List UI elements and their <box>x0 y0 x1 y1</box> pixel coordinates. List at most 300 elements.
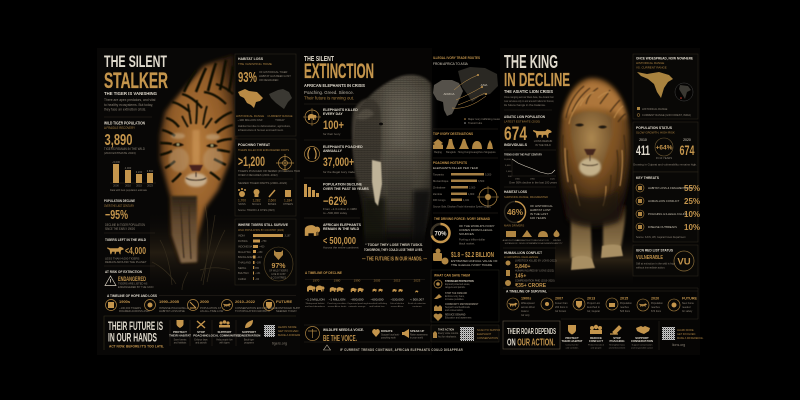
image: ground <box>555 235 633 285</box>
text block: learn more <box>672 329 704 347</box>
timeline: survival: Population <box>620 302 632 305</box>
bar chart: tiger population <box>110 160 156 192</box>
heading: elephant title: THE SILENT <box>304 54 334 63</box>
icon: elephant <box>305 225 320 236</box>
donut chart: 70 percent: 70% <box>434 232 447 238</box>
milestone: 2000: 2000 <box>200 299 210 304</box>
card: habitat loss: SCARCITY <box>551 242 563 245</box>
text block: tagline: Poaching. Greed. Silence. <box>304 90 354 95</box>
heading: tiger title: THE TIGER IS VANISHING <box>104 91 157 96</box>
line chart: trend <box>504 152 558 184</box>
card: habitat loss: HABITAT LOST <box>530 208 551 212</box>
card: habitat loss: AGRICULTURAL <box>503 239 520 242</box>
map: historical range <box>637 72 673 98</box>
action: support conservation: Back tiger <box>244 338 254 342</box>
text block: intro: now survives only in and around India's Gir Forest, <box>504 99 554 103</box>
heading: lion title <box>504 52 570 95</box>
milestone: 1900s: ~100,000 TIGERS <box>119 306 141 310</box>
stat: tigers left in the wild: <4,000 <box>125 246 146 257</box>
milestone: 1990-2005: 1990–2005 <box>159 299 180 304</box>
card: habitat loss: LIVESTOCK <box>537 240 550 242</box>
card: range map: HISTORICAL RANGE <box>636 61 664 65</box>
timeline: survival: reaches <box>620 306 630 309</box>
action: support local communities: SUPPORT <box>218 330 232 334</box>
timeline: decline: 1990 <box>354 278 361 282</box>
card: poaching hotspots: 3,500 <box>478 180 485 183</box>
card: where tigers still survive: 355 <box>255 267 260 270</box>
stat: wild tiger population: TIGERS REMAIN IN THE WILD <box>104 147 145 151</box>
action: support conservation: Support conservation <box>632 344 653 346</box>
map: historical range <box>238 89 263 108</box>
action: protect their habitat <box>561 325 583 350</box>
card: range map: CURRENT RANGE (GIR FOREST, INDIA) <box>642 113 691 117</box>
line chart: trend: 2020 <box>550 178 556 180</box>
heading: tiger title: STALKER <box>104 68 168 93</box>
bar chart: tiger population: 3,890 <box>147 169 154 173</box>
card: habitat loss: HABITAT LOSS <box>238 56 263 61</box>
card: top ivory destinations: Bangkok <box>446 151 457 154</box>
card: poaching threat: 1,282 <box>253 198 261 202</box>
action: protect habitat <box>169 320 191 344</box>
call to action: tiger <box>104 316 307 350</box>
action: protect habitat: and habitats <box>174 342 187 344</box>
timeline: decline: and herd abundance <box>305 305 326 308</box>
icon: crosshair <box>276 154 294 172</box>
stat: tigers left in the wild: LESS THAN 4,000 TIGERS <box>105 256 140 260</box>
card: poaching threat: SKINS <box>238 203 246 206</box>
timeline: decline <box>305 270 427 308</box>
action: stop poaching: Strengthen laws <box>609 344 626 346</box>
card: population status <box>633 122 698 172</box>
card: what can save them: Support local livelihoods <box>445 306 471 309</box>
card: population status: Growing in Gujarat and vulnerability remains high. <box>633 162 697 166</box>
card: habitat loss: HABITAT HAS BEEN LOST <box>259 74 291 78</box>
card: poaching threat: POACHING THREAT <box>238 142 270 147</box>
card: range map: ONCE WIDESPREAD, NOW NOWHERE <box>636 56 694 60</box>
stat: wild tiger population: WILD TIGER POPULATION <box>104 120 145 126</box>
action: reduce conflict: Protect livestock <box>588 344 605 346</box>
stat: poached annually: for the illegal ivory trade <box>323 170 355 174</box>
action: donate: poaching work <box>381 336 397 340</box>
card: poaching threat: TIGERS POACHED OR SEIZED (IN ILLEGAL TRADE) <box>238 169 304 173</box>
card: top ivory destinations: Hong Kong <box>458 151 471 154</box>
card: poaching threat: OVER 2 DECADES (2000–2022) <box>238 173 278 177</box>
card: where tigers still survive: ~400 <box>259 246 265 248</box>
box: take action: Act for elephants. <box>438 336 457 338</box>
timeline: decline: continues <box>412 305 423 308</box>
action: speak up: Raise awareness <box>410 334 428 336</box>
timeline: survival: needed <box>682 306 691 309</box>
text block: intro: they face an extinction crisis. <box>104 108 146 112</box>
timeline: decline: ~1.3 MILLION <box>305 298 325 302</box>
card: what can save them: Expand protected areas, <box>445 283 470 286</box>
card: population status: 411 <box>636 142 650 158</box>
card: poaching threat: 1,700 <box>238 198 246 202</box>
card: iucn status: VULNERABLE <box>636 255 663 261</box>
action: protect their habitat: THEIR HABITAT <box>561 339 583 343</box>
map: india inset <box>675 83 693 101</box>
card: human-lion conflict: COMPENSATION PAID (2015–2020) <box>515 280 555 282</box>
card: poaching threat: BONES <box>268 203 277 206</box>
box: take action <box>431 325 503 342</box>
stat: poached annually <box>304 145 363 174</box>
card: where tigers still survive: 3,167 <box>284 234 291 238</box>
card: poaching threat: Source: TRAFFIC & CITES (2023) <box>238 209 275 212</box>
card: where tigers still survive: BANGLADESH <box>238 255 256 259</box>
card: ivory demand: THE DRIVING FORCE: IVORY DEMAND <box>434 216 490 221</box>
callout: 97 percent: LIVE IN JUST <box>271 274 286 276</box>
line chart: trend: TREND OVER THE PAST CENTURY <box>504 152 542 156</box>
text block: tagline: Their future is running out. <box>304 96 354 100</box>
action: protect habitat: THEIR HABITAT <box>169 334 191 338</box>
icon: star emblem <box>144 300 156 310</box>
line chart: trend: 1900 <box>515 178 521 180</box>
card: human-lion conflict: A GROWING CHALLENGE <box>504 255 538 259</box>
stat: asiatic lion population: LIONS REMAIN <box>534 139 552 143</box>
action: stop poaching: Enforce laws <box>194 338 208 342</box>
action: speak up: SPEAK UP <box>410 329 424 333</box>
stat: at risk of extinction <box>105 269 153 289</box>
card: habitat loss: OF HISTORICAL TIGER <box>259 70 287 74</box>
stat: population decline: SINCE THE EARLY 1900S <box>105 227 135 231</box>
card: range map: VS. CURRENT RANGE <box>636 66 667 70</box>
action: stop poaching: STOP <box>613 336 621 340</box>
milestone: future: FUTURE <box>276 299 293 304</box>
action: support conservation: programs <box>244 342 255 344</box>
image: elephant <box>350 70 434 250</box>
bar chart: tiger population: 2023 <box>147 184 153 188</box>
timeline: survival: reaches <box>651 306 661 309</box>
icons: seized parts <box>238 188 291 197</box>
action: support conservation: SUPPORT <box>242 330 256 334</box>
timeline: decline: 1970 <box>313 278 320 282</box>
timeline: survival: 2007 <box>555 296 563 300</box>
timeline: survival: 674 lions <box>651 310 662 313</box>
timeline: hope and loss <box>106 294 309 313</box>
card: population status: 2010 <box>639 138 647 142</box>
card: population status: SLOW GROWTH, HIGH RISK <box>636 130 675 134</box>
text block: learn more <box>272 325 307 346</box>
card: range map: HISTORICAL RANGE <box>642 107 668 111</box>
card: habitat loss: INFRASTRUCTURE <box>517 239 538 242</box>
line chart: trend: 10,000 <box>504 159 511 161</box>
text block: learn more: lions.org <box>672 343 685 347</box>
card: what can save them: WHAT CAN SAVE THEM <box>434 272 470 278</box>
stat: remaining in the wild: REMAIN IN THE WILD <box>323 227 360 231</box>
stat: killed every day: for their ivory <box>323 132 341 136</box>
card: poaching threat: 2,600 <box>268 198 276 202</box>
card: key threats <box>633 172 700 242</box>
map: africa and asia: AFRICA <box>443 92 455 96</box>
warning strip <box>324 345 463 352</box>
action: stop poaching <box>609 326 626 350</box>
card: habitat loss: Habitat lost due to deforestation, agriculture, <box>238 124 291 128</box>
icons: shrinking herds <box>307 286 418 293</box>
card: ivory demand: OF THE WORLD'S IVORY <box>459 224 495 228</box>
callout: 97 percent: OF WILD TIGERS <box>269 270 288 272</box>
stat: population decline: −95% <box>105 207 128 222</box>
text block: intro: There are apex predators, and vital <box>104 98 156 102</box>
card: where tigers still survive <box>235 219 296 285</box>
card: poaching threat: SEIZED TIGER PARTS (2000–2022) <box>238 181 287 185</box>
card: key threats: 10% <box>684 223 700 232</box>
card: poaching hotspots: Tanzania <box>433 172 444 176</box>
card: where tigers still survive: BHUTAN <box>238 271 249 275</box>
icon: shield <box>264 300 274 310</box>
bar chart: tiger population: 2010 <box>125 184 131 188</box>
card: where tigers still survive: RUSSIA <box>238 239 248 243</box>
qr code <box>662 327 675 340</box>
card: where tigers still survive: THAILAND <box>238 260 251 264</box>
timeline: decline: ~800,000 <box>350 298 364 302</box>
card: where tigers still survive: WILD POPULATION BY COUNTRY (2023) <box>238 228 284 232</box>
card: population status: POPULATION STATUS <box>636 125 672 130</box>
card: iucn status: without immediate action. <box>636 266 666 270</box>
stat: population decline: −62% <box>323 194 347 208</box>
qr code <box>264 325 275 337</box>
text block: intro <box>504 95 554 107</box>
card: poaching threat: 1,184 <box>284 198 292 202</box>
timeline: decline: Intensified trafficking <box>367 302 388 305</box>
stat: tigers left in the wild: REMAIN AROUND THE PLANET <box>105 260 147 264</box>
card: poaching hotspots: 5,200 <box>485 174 492 176</box>
stat: at risk of extinction: ENDANGERED <box>118 277 146 283</box>
action: stop poaching: and patrols <box>195 342 208 344</box>
card: ivory trade routes: Major ivory trafficking routes <box>468 117 501 121</box>
card: ivory demand: ESTIMATED ANNUAL VALUE OF <box>451 259 498 263</box>
timeline: decline: A TIMELINE OF DECLINE <box>305 270 342 275</box>
timeline: survival: 2013 <box>587 296 595 300</box>
stat: population decline: POPULATION DECLINE <box>323 182 363 186</box>
timeline: decline: 2023 <box>414 278 421 282</box>
heading: lion title: THE ASIATIC LION CRISIS <box>504 89 554 95</box>
map: africa and asia: ASIA <box>481 83 487 87</box>
milestone: 1900s <box>119 299 150 313</box>
icon: heart <box>372 329 380 337</box>
stat: population decline: POPULATION DECLINE <box>104 198 135 203</box>
icon: tiger silhouette <box>107 247 124 254</box>
timeline: decline: Critical decline <box>390 302 405 305</box>
milestone: 2010-2022: TO POPULATION GROWTH <box>235 309 270 313</box>
heading: elephant title: EXTINCTION <box>304 60 374 83</box>
card: habitat loss <box>235 54 296 136</box>
action: support conservation: CONSERVATION <box>238 334 260 338</box>
badge: VU: VU <box>677 256 691 268</box>
icon: scales emblem <box>306 326 320 340</box>
line chart: trend: 1950 <box>530 178 536 180</box>
card: where tigers still survive: ~131 <box>255 272 261 275</box>
card: ivory demand <box>432 213 498 267</box>
stat: asiatic lion population: IN THE WILD <box>535 143 551 147</box>
stat: population decline <box>304 182 369 215</box>
card: where tigers still survive: MALAYSIA <box>238 250 251 254</box>
card: what can save them: REDUCE DEMAND <box>445 314 466 316</box>
stat: tigers left in the wild <box>105 237 147 264</box>
card: population status: 2020 <box>683 138 691 142</box>
timeline: survival: New home <box>682 302 695 305</box>
timeline: survival: A TIMELINE OF SURVIVAL <box>506 288 548 294</box>
card: human-lion conflict: LIVESTOCK KILLED BY LIONS (2022) <box>515 260 557 262</box>
card: habitat loss: IN THE LAST <box>530 212 548 216</box>
stat: killed every day <box>303 108 358 136</box>
callout: 97 percent: 97% <box>271 263 286 270</box>
text block: learn more: MAKE A DIFFERENCE <box>278 333 307 337</box>
text block: learn more: MAKE A DIFFERENCE. <box>677 337 704 340</box>
bar chart: tiger population: ~5,000 <box>112 160 121 164</box>
card: population status: 674 <box>680 142 695 158</box>
action: reduce conflict: and people <box>591 348 602 350</box>
call to action: lion: THEIR ROAR DEPENDS <box>507 327 556 336</box>
action: stop poaching: POACHING <box>193 334 210 338</box>
stat: at risk of extinction: ENDANGERED BY THE IUCN <box>118 285 153 289</box>
card: human-lion conflict: HUMAN INJURED BY LIONS (2022) <box>515 270 554 272</box>
card: top ivory destinations: Beijing <box>434 151 442 154</box>
card: where tigers still survive: CHINA <box>238 277 246 281</box>
stat: killed every day: ELEPHANTS KILLED <box>323 108 358 112</box>
action: support local communities: LOCAL COMMUNITIES <box>209 334 240 338</box>
card: habitat loss: 93% <box>238 69 257 86</box>
callout: 97 percent <box>264 247 293 281</box>
stat: wild tiger population: (2023 ESTIMATE 2023) <box>104 151 136 155</box>
call to action: lion: ON OUR ACTION. <box>507 338 555 348</box>
call to action: tiger: THEIR FUTURE IS <box>108 319 163 333</box>
timeline: hope and loss: A TIMELINE OF HOPE AND LOSS <box>107 294 157 298</box>
stat: poached annually: 37,000+ <box>323 155 354 169</box>
card: habitat loss: HISTORICAL RANGE <box>236 114 264 118</box>
timeline: decline: 2015 <box>394 278 401 282</box>
timeline: decline: 1980 <box>334 278 341 282</box>
heading: lion title: THE KING <box>504 52 558 72</box>
action: protect their habitat: and corridors <box>566 346 579 350</box>
card: key threats: 55% <box>684 184 700 193</box>
action: stop poaching: POACHING <box>609 339 625 343</box>
box: take action: SCAN TO SUPPORT <box>477 328 503 332</box>
card: what can save them: rangers and patrols. <box>445 286 466 289</box>
timeline: survival: launched in <box>587 306 600 309</box>
map: current range <box>269 89 292 109</box>
text block: intro: its future hangs in the balance. <box>504 103 546 107</box>
card: habitat loss: EXPANSION <box>505 242 518 245</box>
card: habitat loss: OF HISTORICAL <box>530 204 553 208</box>
image: tiger <box>160 55 235 263</box>
line chart: trend: 1,000 <box>506 171 512 173</box>
card: poaching threat: OTHERS <box>283 203 293 206</box>
quote: — THE FUTURE IS IN OUR HANDS. — <box>362 256 427 262</box>
card: where tigers still survive: ~750 <box>261 240 267 243</box>
card: ivory demand: $1.8 – $2.2 BILLION <box>451 252 494 259</box>
text block: intro: to healthy ecosystems. But today, <box>104 103 153 107</box>
timeline: survival: FUTURE <box>682 296 697 300</box>
text block: learn more: tigers.org <box>272 342 287 346</box>
milestone: 1900s: 1900s <box>119 299 131 304</box>
card: habitat loss: SHRINKING RANGE, FRAGMENTED <box>504 195 549 199</box>
card: iucn status: Still at extinction in the wild is high <box>636 262 676 266</box>
card: poaching threat: TIGERS KILLED FOR ENDANGERED PARTS <box>238 148 289 152</box>
stat: wild tiger population: 3,890 <box>104 132 133 149</box>
icons: actions <box>434 280 442 321</box>
stat: remaining in the wild: AFRICAN ELEPHANTS <box>323 223 362 227</box>
card: habitat loss: THE VANISHING HOME <box>238 62 272 66</box>
image: lion <box>560 78 630 270</box>
action: stop poaching <box>193 321 210 344</box>
timeline: survival: 523 lions <box>620 310 631 313</box>
milestone: future: NEEDED TODAY <box>276 309 297 313</box>
timeline: survival: Gir Forest <box>555 310 566 313</box>
card: poaching hotspots: 1,800 <box>468 193 475 196</box>
timeline: decline: Poaching escalates <box>328 302 347 305</box>
panel: lion <box>500 48 704 355</box>
icon: megaphone <box>402 329 409 338</box>
card: human-lion conflict: 5,840+ <box>515 264 531 270</box>
card: ivory trade routes: FROM AFRICA TO ASIA <box>433 62 469 66</box>
card: poaching hotspots: 1,041 <box>463 199 470 202</box>
card: key threats: KEY THREATS <box>636 175 659 180</box>
icon: coins <box>433 248 448 264</box>
action: reduce conflict: CONFLICT <box>589 339 603 343</box>
card: key threats: Source: IUCN, WII, Gujarat Forest Department <box>636 236 686 239</box>
card: where tigers still survive: WHERE TIGERS STILL SURVIVE <box>238 223 288 227</box>
timeline: decline: A risk of extinction <box>408 302 427 305</box>
timeline: decline: across Africa <box>391 305 404 308</box>
card: where tigers still survive: ~60 <box>255 278 260 281</box>
call to action: tiger: IN OUR HANDS <box>108 330 157 344</box>
card: habitat loss: 100 YEARS <box>530 216 546 220</box>
action: donate: DONATE <box>381 329 393 333</box>
card: poaching hotspots: DR Congo <box>433 198 446 202</box>
icon: calendar <box>106 300 116 310</box>
timeline: survival: Asia to <box>521 310 529 313</box>
bar chart: tiger population: 3,200 <box>136 170 143 174</box>
card: habitat loss: OR DEGRADED <box>259 78 278 82</box>
timeline: survival: 2020 <box>651 296 659 300</box>
icon: warning triangle <box>105 276 116 286</box>
timeline: decline: ~600,000 <box>370 298 384 302</box>
card: ivory demand: Fueling a billion-dollar <box>459 238 485 242</box>
box: take action: CONSERVATION <box>477 336 498 340</box>
stat: asiatic lion population <box>504 114 552 147</box>
timeline: decline: Widespread habitat <box>306 302 325 305</box>
action: support conservation <box>631 326 654 350</box>
stat: poached annually: ANNUALLY <box>323 149 343 153</box>
milestone: future: CONTINUED SUPPORT IS <box>276 306 309 310</box>
card: habitat loss: WATER <box>553 239 561 242</box>
card: where tigers still survive: ~114 <box>256 256 262 259</box>
card: ivory demand: black market. <box>459 242 475 246</box>
timeline: survival: Gir only <box>521 314 530 317</box>
text block: tagline <box>304 90 354 100</box>
bar chart: tiger population: 2000 <box>113 184 119 188</box>
bar chart: tiger population: 2015 <box>136 184 142 188</box>
stat: population decline: to ~500,000 today <box>323 211 348 215</box>
milestone: future <box>276 299 309 313</box>
icons: conflict <box>505 260 511 286</box>
card: what can save them: and conservation. <box>445 309 463 312</box>
call to action: tiger: ACT NOW. BEFORE IT'S TOO LATE. <box>109 344 164 348</box>
milestone: 2010-2022 <box>235 299 277 313</box>
icons: landmarks <box>433 139 493 149</box>
card: poaching hotspots: Mozambique <box>433 179 449 183</box>
stat: asiatic lion population: ASIATIC LION POPULATION <box>504 114 545 119</box>
card: poaching threat: >1,200 <box>238 153 265 169</box>
card: ivory demand: COMES FROM ILLEGAL <box>459 228 493 232</box>
banner: be the voice <box>304 325 430 343</box>
card: key threats: HABITAT LOSS & FRAGMENTATION <box>648 186 693 190</box>
card: where tigers still survive: ~189 <box>256 262 262 264</box>
card: human-lion conflict: 145+ <box>515 274 526 280</box>
card: poaching hotspots: Zimbabwe <box>433 186 446 190</box>
card: poaching hotspots: 2,000 <box>469 186 476 190</box>
card: habitat loss: TODAY <box>275 118 285 122</box>
